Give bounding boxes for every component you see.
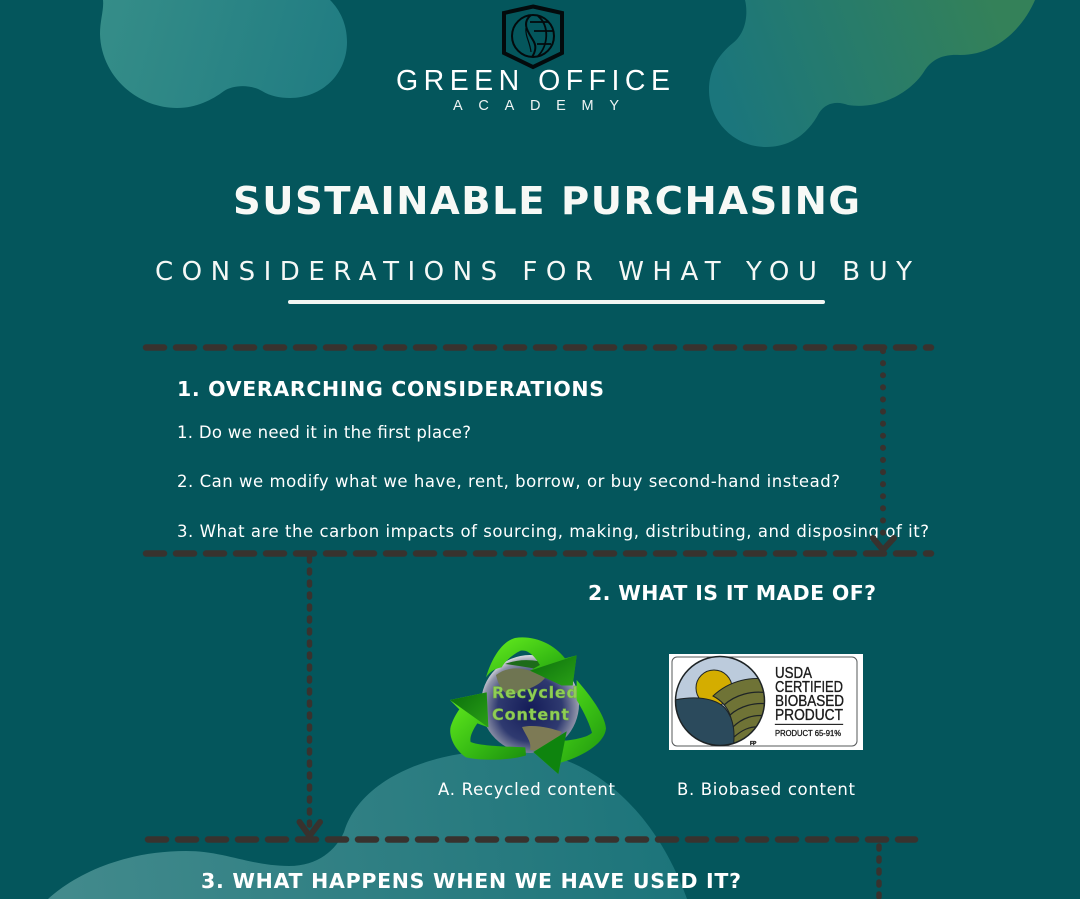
- content label: Content: [492, 705, 569, 724]
- icon: USDA certified biobased badge: USDA: [775, 665, 813, 682]
- icon: USDA certified biobased badge: CERTIFIED: [775, 679, 843, 696]
- question 3: 3. What are the carbon impacts of sourcing, making, distributing, and disposing of it?: [177, 522, 929, 541]
- title: SUSTAINABLE PURCHASING: [233, 179, 860, 224]
- logo: Green Office Academy: [396, 6, 670, 114]
- section 1 heading: 1. OVERARCHING CONSIDERATIONS: [177, 377, 604, 401]
- caption: recycled content: A. Recycled content: [438, 780, 616, 799]
- title underline: [290, 300, 823, 304]
- blob: bottom hills: [48, 750, 687, 899]
- blob: top right: [709, 0, 1035, 147]
- recycling arrow: top: [486, 637, 577, 685]
- section 2 heading: 2. WHAT IS IT MADE OF?: [588, 581, 876, 605]
- subtitle: CONSIDERATIONS FOR WHAT YOU BUY: [155, 257, 912, 287]
- icon: USDA certified biobased badge: BIOBASED: [775, 693, 844, 710]
- arrow: dotted connector from bottom divider: [876, 846, 882, 899]
- globe: [481, 655, 579, 753]
- dashed divider: top: [146, 344, 931, 351]
- icon: USDA certified biobased badge: PRODUCT 65-91%: [775, 729, 841, 738]
- section 3 heading: 3. WHAT HAPPENS WHEN WE HAVE USED IT?: [201, 869, 741, 893]
- icon: USDA certified biobased badge: FP: [750, 741, 757, 747]
- dashed divider: middle: [146, 550, 931, 557]
- blob: top left: [100, 0, 347, 108]
- recycling arrow: right: [533, 680, 606, 774]
- question 2: 2. Can we modify what we have, rent, borrow, or buy second-hand instead?: [177, 472, 840, 491]
- dashed divider: bottom: [148, 836, 915, 843]
- icon: USDA certified biobased badge: PRODUCT: [775, 707, 843, 724]
- question 1: 1. Do we need it in the first place?: [177, 423, 471, 442]
- section 1: overarching considerations: [177, 377, 929, 541]
- arrow: dotted connector from section 1: [873, 351, 894, 550]
- logo wordmark: GREEN OFFICE: [396, 65, 670, 97]
- icon: USDA certified biobased badge: [669, 654, 863, 750]
- arrow: dotted connector to section 3: [300, 558, 320, 836]
- icon: shield with globe: [504, 6, 562, 67]
- recycled label: Recycled: [492, 683, 578, 702]
- caption: biobased content: B. Biobased content: [677, 780, 856, 799]
- logo subtitle: ACADEMY: [453, 98, 619, 114]
- icon: recycled content globe: [450, 637, 606, 774]
- recycling arrow: left: [450, 692, 526, 760]
